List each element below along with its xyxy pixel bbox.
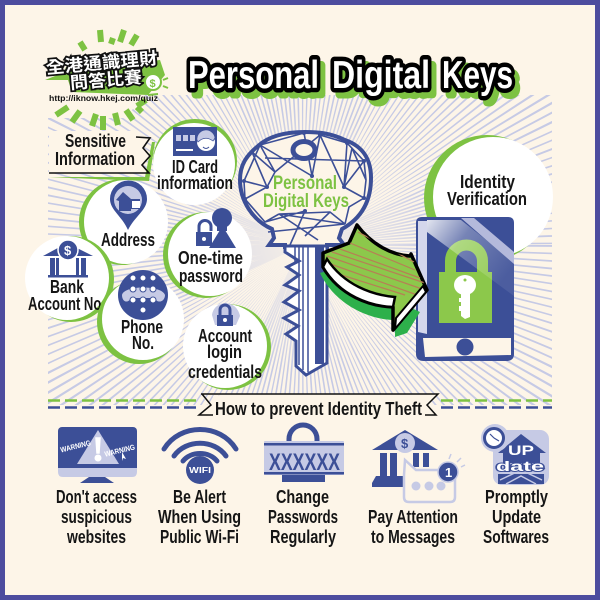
- tip: change passwords: [264, 425, 344, 547]
- badge green underlay: [45, 60, 165, 95]
- icon: lock: [212, 303, 240, 326]
- circle: bank account: [25, 236, 114, 322]
- circle: account login: login: [207, 342, 242, 362]
- tip: update softwares: [481, 424, 549, 547]
- icon: person and open lock: [196, 208, 236, 248]
- badge title line 1: 全港通識理財: [45, 48, 158, 78]
- home button: [456, 338, 474, 356]
- circle: phone: [97, 270, 184, 364]
- tip: suspicious websites: [56, 427, 137, 547]
- heading: sensitive information: [49, 131, 155, 181]
- icon: map pin house: [110, 180, 147, 230]
- tip: suspicious websites: suspicious: [61, 507, 132, 527]
- badge title line 2: 問答比賽: [69, 67, 143, 93]
- icon: bank: $: [401, 436, 409, 451]
- title text: [188, 54, 513, 97]
- verification circle: [424, 135, 550, 261]
- heading: how to prevent identity theft: How to prevent Identity Theft: [215, 399, 422, 419]
- sunburst background: [48, 95, 552, 405]
- tip: pay attention to messages: Pay Attention: [368, 507, 458, 527]
- title: [188, 54, 518, 103]
- icon: message bubble: 1: [445, 465, 452, 480]
- circle: phone: No.: [132, 333, 154, 353]
- competition badge: [45, 30, 168, 130]
- tip: change passwords: Change: [276, 487, 329, 507]
- tip: suspicious websites: Don't access: [56, 487, 137, 507]
- phone body: [416, 217, 514, 361]
- ribbon: [49, 131, 150, 173]
- icon: phone keypad: [118, 270, 168, 320]
- title shadow: Keys: [447, 60, 518, 103]
- circle: id card: information: [157, 173, 233, 193]
- tip: suspicious websites: websites: [66, 527, 126, 547]
- key label: Personal: [273, 173, 337, 194]
- key shaft: [284, 246, 327, 375]
- circle: account login: credentials: [188, 362, 262, 382]
- circle: bank account: Account No.: [28, 294, 105, 314]
- icon: warning monitor: WARNING: [104, 442, 136, 459]
- ribbon: [199, 394, 438, 415]
- screen glare: [418, 220, 514, 296]
- tip: public wi-fi: [158, 430, 241, 547]
- icon: warning monitor: [58, 427, 137, 483]
- circle: one-time password: [163, 208, 252, 298]
- white key: [454, 275, 476, 319]
- tip: pay attention to messages: [368, 430, 465, 547]
- identity verification: [424, 135, 553, 261]
- identity verification: Verification: [447, 189, 527, 209]
- key label: Digital Keys: [263, 191, 349, 212]
- tip: public wi-fi: Public Wi-Fi: [160, 527, 239, 547]
- circle: account login: Account: [198, 326, 252, 346]
- icon: update: date: [496, 458, 544, 474]
- tip: change passwords: Regularly: [270, 527, 336, 547]
- title shadow: Digital: [337, 60, 435, 103]
- circle: bank account: Bank: [50, 277, 85, 297]
- network lines: [244, 133, 366, 245]
- icon: password lock: XXXXXX: [269, 449, 340, 476]
- icon: id card: [173, 127, 217, 156]
- key: [240, 131, 371, 375]
- key head: [240, 131, 371, 247]
- icon: update: [481, 424, 549, 485]
- key hole: [293, 142, 315, 158]
- section divider: green and blue dashes: [48, 400, 552, 408]
- icon: warning monitor: WARNING: [59, 438, 92, 454]
- circle: address: [79, 179, 168, 265]
- key label: [263, 173, 349, 212]
- tip: public wi-fi: When Using: [158, 507, 241, 527]
- title text: Personal: [188, 54, 319, 97]
- icon: dollar bulb: $: [150, 78, 156, 90]
- icon: update: UP: [508, 442, 534, 458]
- tip: public wi-fi: Be Alert: [173, 487, 226, 507]
- badge url: http://iknow.hkej.com/quiz: [49, 94, 158, 103]
- circle: id card: [153, 119, 237, 205]
- title text: Digital: [332, 54, 430, 97]
- icon: wifi: WIFI: [189, 466, 211, 475]
- circle: one-time password: One-time: [178, 248, 243, 268]
- tip: update softwares: Update: [492, 507, 541, 527]
- circle: phone: Phone: [121, 317, 163, 337]
- left edge: [418, 221, 427, 334]
- title text: Keys: [442, 54, 513, 97]
- identity verification: Identity: [460, 172, 515, 192]
- phone with lock: [416, 217, 514, 361]
- circle: one-time password: password: [179, 266, 243, 286]
- arrow white band: [323, 259, 395, 307]
- arrow: [320, 225, 427, 337]
- title shadow: [193, 60, 518, 103]
- circle: id card: ID Card: [172, 157, 218, 177]
- heading: how to prevent identity theft: [199, 394, 438, 419]
- title shadow: Personal: [193, 60, 324, 103]
- circle: address: Address: [101, 230, 155, 250]
- ribbon text: Sensitive: [65, 131, 126, 151]
- icon: bank: $: [64, 243, 72, 258]
- badge rays: [56, 30, 146, 130]
- tip: pay attention to messages: to Messages: [371, 527, 455, 547]
- circle: account login: [183, 303, 271, 390]
- lock: [439, 245, 492, 323]
- tip: change passwords: Passwords: [268, 507, 338, 527]
- tip: update softwares: Promptly: [485, 487, 548, 507]
- tip: update softwares: Softwares: [483, 527, 549, 547]
- heading: sensitive information: Information: [55, 149, 135, 169]
